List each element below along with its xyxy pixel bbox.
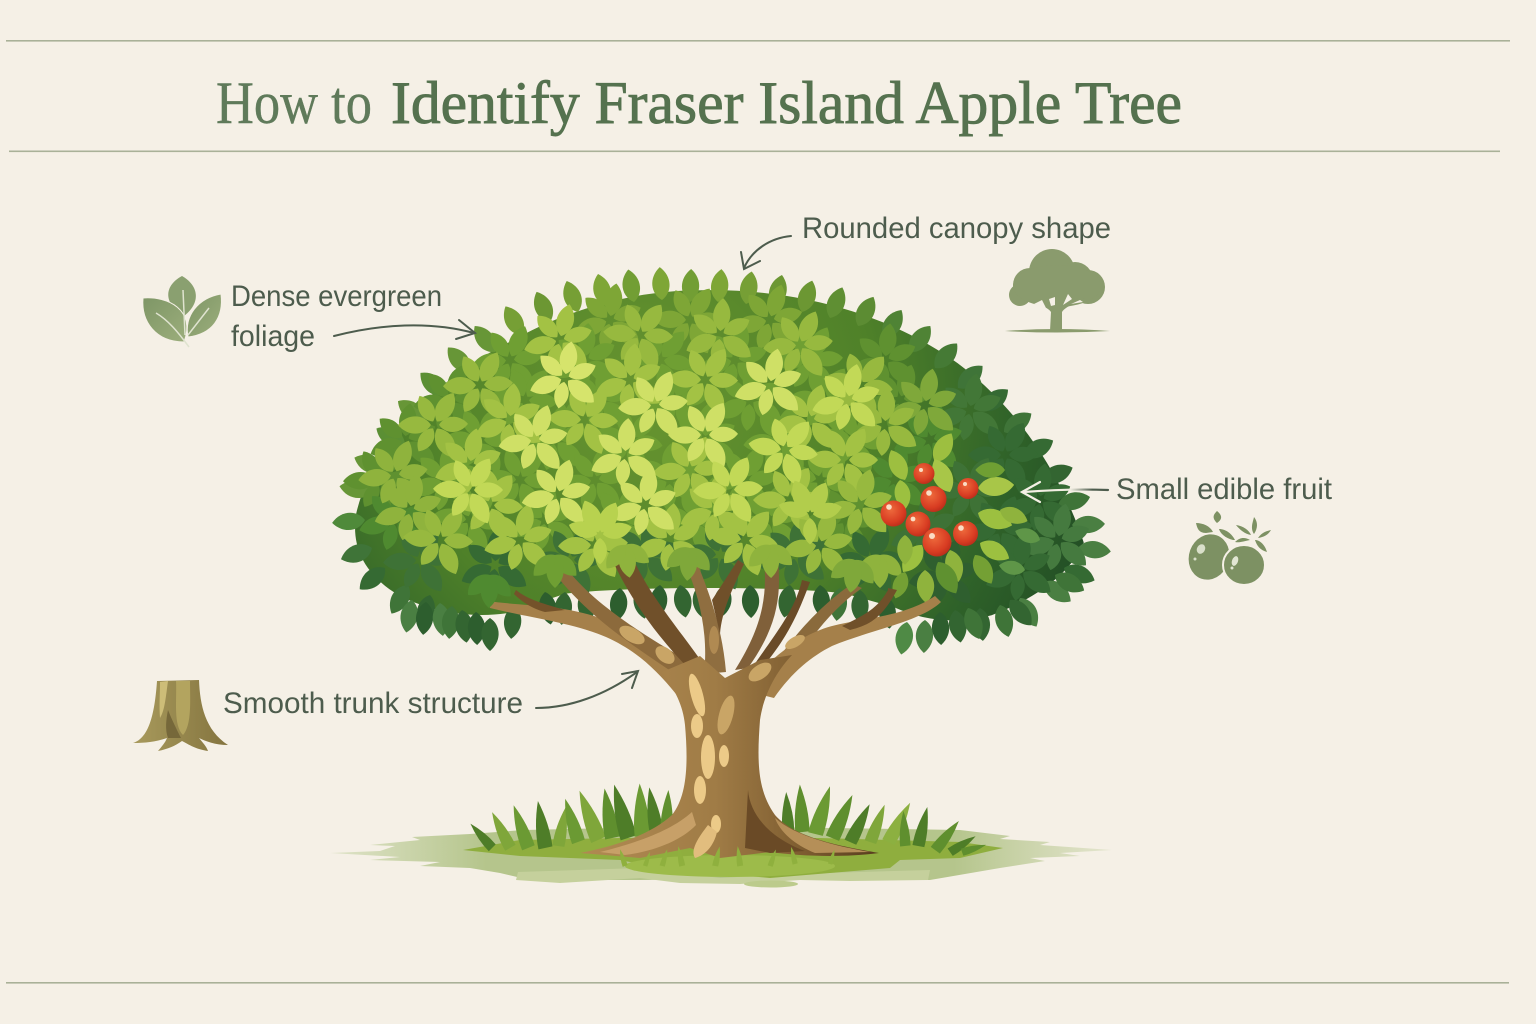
label: dense evergreen foliage: foliage — [231, 320, 315, 353]
label: dense evergreen foliage — [231, 280, 475, 353]
label: dense evergreen foliage: Dense evergreen — [231, 280, 442, 313]
arrow: to canopy top — [741, 236, 791, 269]
perimeter leaves: right and lower — [338, 293, 1112, 656]
label: rounded canopy shape — [741, 212, 1111, 269]
light green leaf layer — [350, 284, 969, 590]
title: How to — [216, 70, 372, 136]
label: small edible fruit: Small edible fruit — [1116, 473, 1333, 506]
grass at trunk base — [617, 846, 836, 867]
arrow: to trunk — [536, 671, 638, 708]
fruit leaves — [883, 429, 1042, 603]
perimeter leaves: upper left — [331, 266, 850, 531]
branches — [488, 555, 941, 698]
label: rounded canopy shape: Rounded canopy shape — [802, 212, 1111, 245]
tree canopy — [331, 266, 1112, 656]
bright leaf layer — [423, 335, 893, 564]
icon: fruit pair — [1182, 511, 1271, 585]
icon: leaves — [143, 276, 221, 347]
label: smooth trunk structure — [223, 671, 638, 720]
bark patches — [686, 672, 738, 858]
red fruit cluster — [880, 463, 978, 556]
icon: tree stump — [133, 680, 228, 751]
mid green leaf layer — [333, 269, 1102, 616]
title: Identify Fraser Island Apple Tree — [391, 70, 1182, 136]
foreground leaves over branch tips — [462, 536, 882, 609]
label: smooth trunk structure: Smooth trunk structure — [223, 687, 523, 720]
arrow: to fruit — [1022, 482, 1108, 502]
ground patch — [330, 826, 1112, 888]
arrow: to foliage — [334, 320, 475, 339]
label: small edible fruit — [1022, 473, 1333, 506]
grass tufts — [466, 783, 987, 856]
icon: tree silhouette — [1005, 249, 1110, 332]
trunk — [580, 655, 879, 858]
tree trunk and branches — [462, 536, 941, 867]
